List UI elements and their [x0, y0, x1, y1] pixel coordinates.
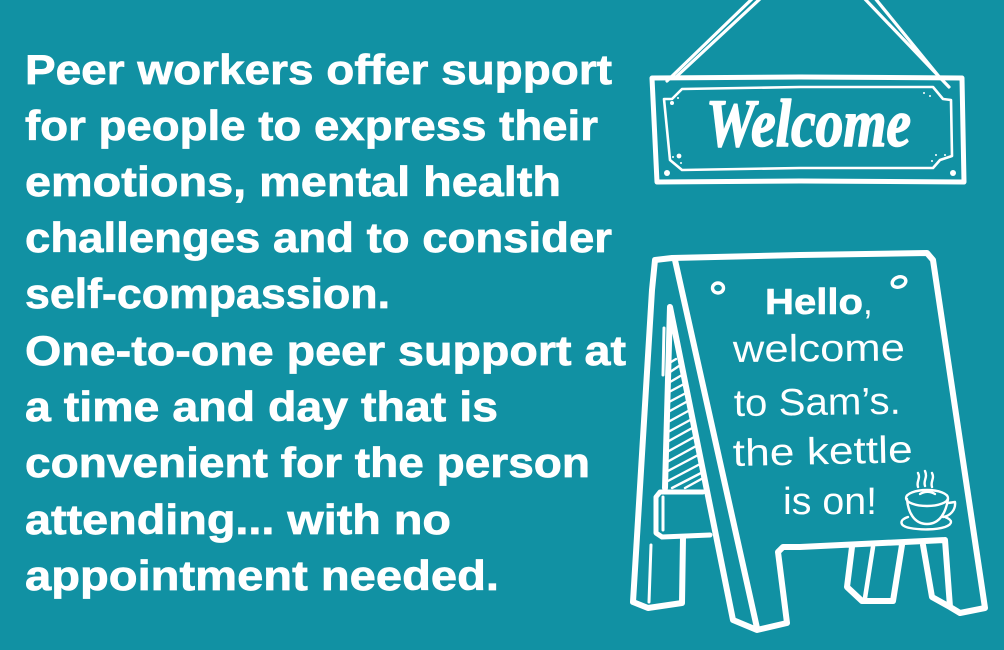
board message: is on!: [783, 481, 877, 523]
text block: peer support description: challenges and to consider: [25, 214, 612, 261]
board message: [732, 281, 913, 523]
text block: peer support description: self-compassion.: [25, 270, 390, 317]
sign inner frame: [664, 87, 952, 170]
hatching: [666, 359, 705, 488]
hole left: [712, 283, 724, 293]
board message: Hello: [765, 281, 863, 322]
text block: peer support description: appointment needed.: [25, 552, 499, 599]
text block: peer support description: [25, 46, 626, 599]
board message: ,: [863, 283, 873, 322]
A-board sign: [633, 253, 985, 630]
text block: peer support description: convenient for the person: [25, 439, 590, 486]
board message: the kettle: [732, 429, 913, 475]
sign word: Welcome: Welcome: [706, 85, 911, 161]
sign strings: [667, 0, 949, 87]
board message: welcome: [732, 328, 905, 371]
text block: peer support description: Peer workers offer support: [25, 46, 612, 93]
board leg details: [865, 547, 873, 598]
board outline: [633, 253, 985, 630]
text block: peer support description: attending... with no: [25, 496, 451, 543]
icon: coffee cup: [901, 471, 955, 529]
hole right: [891, 275, 907, 289]
text block: peer support description: One-to-one peer support at: [25, 327, 626, 374]
text block: peer support description: emotions, mental health: [25, 158, 561, 205]
sign board outline: [652, 77, 964, 182]
sign corner dots: [664, 92, 956, 176]
text block: peer support description: a time and day that is: [25, 383, 498, 430]
hanging welcome sign: [652, 0, 964, 182]
board message: to Sam’s.: [734, 381, 901, 425]
text block: peer support description: for people to express their: [25, 102, 598, 149]
bracket: [656, 492, 710, 537]
